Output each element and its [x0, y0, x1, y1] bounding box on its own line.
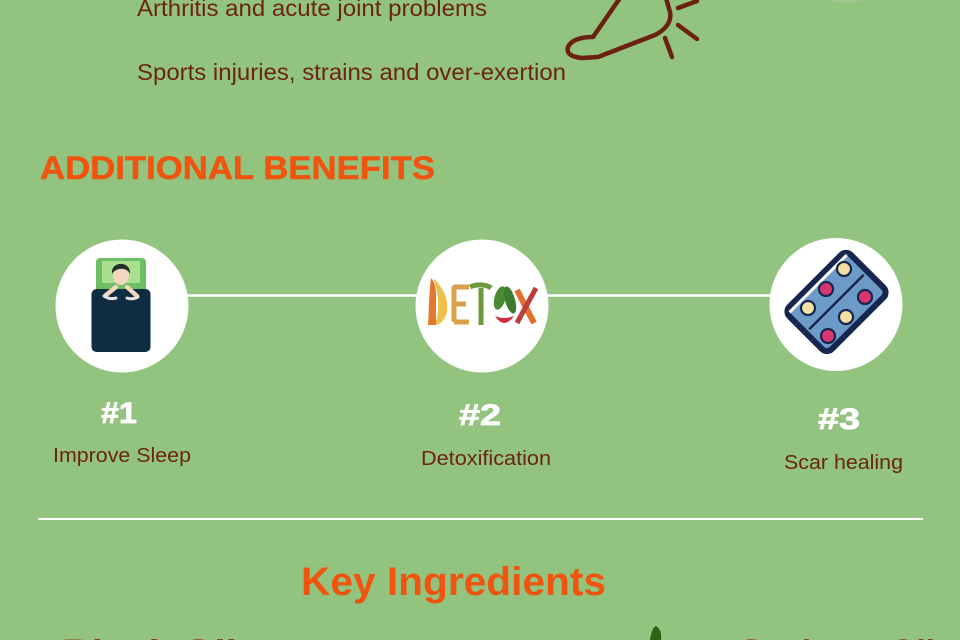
benefit list: joint problems and injuries: Sports injuries, strains and over-exertion [137, 59, 566, 85]
label: scar healing: Scar healing [784, 451, 903, 474]
icon: person sleeping in bed [56, 240, 188, 372]
number 1: #1 [101, 397, 137, 430]
decorative cut-off shape top right [826, 0, 864, 3]
icon: green plant tip [650, 626, 661, 640]
icon: blister pack of pills [770, 238, 902, 371]
connector line between benefits [185, 294, 775, 297]
benefit 3: scar healing [770, 238, 903, 474]
benefit 2: detoxification [416, 240, 551, 470]
label: detoxification: Detoxification [421, 447, 551, 470]
benefit 1: improve sleep [53, 240, 191, 467]
heading: key ingredients: Key Ingredients [301, 560, 606, 604]
icon: aching foot with pain rays [568, 0, 697, 58]
benefit list: joint problems and injuries [137, 0, 566, 85]
heading: additional benefits: ADDITIONAL BENEFITS [40, 150, 435, 186]
number 3: #3 [818, 403, 860, 436]
icon: detox lettering made of vegetables [416, 240, 548, 372]
number 2: #2 [459, 399, 501, 432]
section divider [38, 518, 923, 520]
label: improve sleep: Improve Sleep [53, 444, 191, 467]
